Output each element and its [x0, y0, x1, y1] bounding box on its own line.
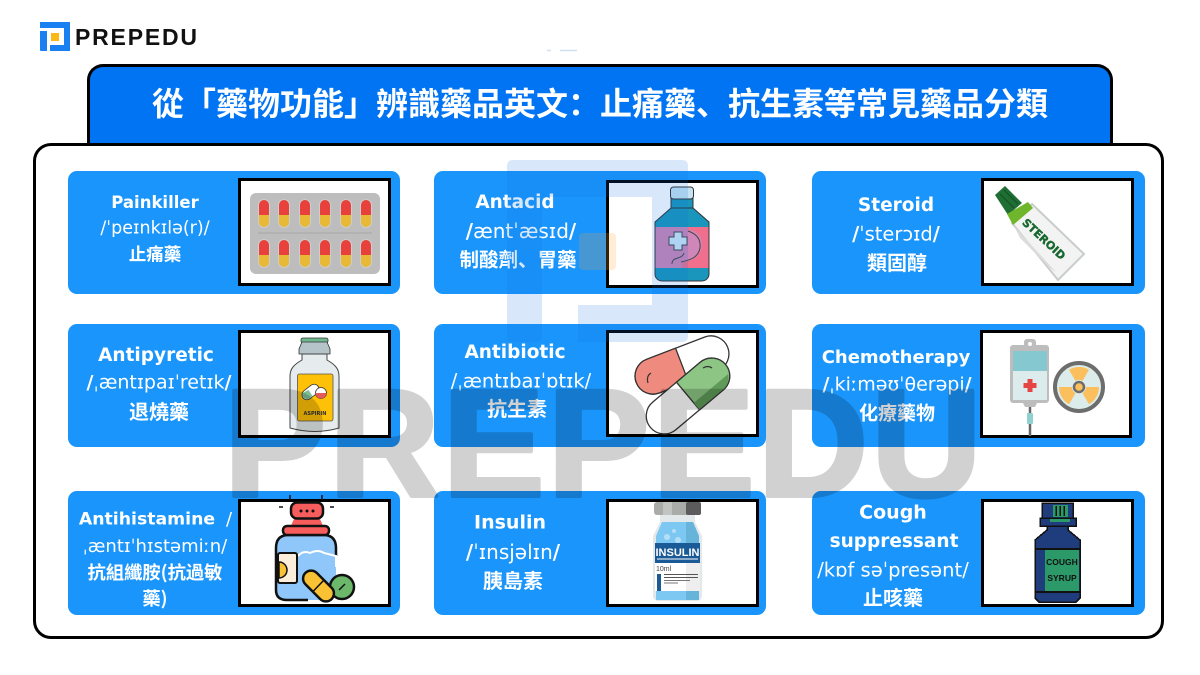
text: Antihistamine: Antihistamine: [79, 509, 215, 529]
text: Antacid: Antacid: [475, 192, 555, 213]
text: Antibiotic: /ˌæntɪbaɪˈɒtɪk/: [451, 369, 591, 392]
icon: steroid tube: [981, 178, 1134, 286]
icon: cough syrup bottle: SYRUP: [1047, 573, 1077, 583]
text: Steroid: 類固醇: [867, 247, 927, 276]
text: Cough suppressant: 止咳藥: [863, 582, 923, 611]
text: Painkiller: [100, 193, 210, 266]
card: Antihistamine: [68, 491, 400, 615]
watermark: PREPEDU logo and wordmark: PREPEDU: [224, 358, 985, 529]
text: Insulin: [466, 512, 560, 594]
icon: antibiotic capsules: [606, 330, 759, 437]
text: Painkiller: Painkiller: [111, 193, 199, 212]
icon: antacid bottle: [606, 180, 759, 288]
icon: insulin vial: INSULIN: [656, 547, 700, 559]
card: Cough suppressant: [812, 491, 1145, 615]
icon: IV bag and radiation symbol: [980, 330, 1132, 438]
text: Antihistamine: 藥): [142, 585, 168, 611]
logo: PREPEDU: [40, 22, 199, 51]
text: Antacid: /æntˈæsɪd/: [466, 219, 576, 243]
logo: PREPEDU: PREPEDU: [75, 24, 199, 50]
text: Antipyretic: [86, 345, 232, 425]
text: Chemotherapy: Chemotherapy: [822, 347, 970, 368]
text: Chemotherapy: [822, 347, 972, 426]
card: Insulin: [434, 491, 766, 615]
icon: aspirin bottle: ASPIRIN: [304, 411, 326, 417]
card: Painkiller: [68, 171, 400, 294]
card: Antipyretic: [68, 324, 400, 447]
text: Antipyretic: Antipyretic: [98, 345, 214, 366]
text: Cough suppressant: suppressant: [830, 531, 958, 552]
text: Antihistamine: 抗組纖胺(抗過敏: [88, 559, 222, 585]
text: Antihistamine: /: [226, 509, 232, 530]
text: Insulin: Insulin: [474, 512, 546, 534]
text: Chemotherapy: /ˌkiːməʊˈθerəpi/: [822, 374, 972, 396]
main panel: [33, 143, 1164, 639]
icon: steroid tube: STEROID: [1019, 216, 1068, 263]
text: Steroid: Steroid: [858, 195, 934, 216]
text: Steroid: [852, 195, 940, 276]
text: Chemotherapy: 化療藥物: [859, 398, 935, 426]
title tab: [87, 64, 1113, 147]
text: Antipyretic: /ˌæntɪpaɪˈretɪk/: [87, 372, 231, 394]
icon: insulin vial: [606, 499, 759, 607]
text: Antibiotic: Antibiotic: [464, 342, 566, 363]
text: Painkiller: /ˈpeɪnkɪlə(r)/: [100, 218, 210, 238]
text: Antacid: [459, 192, 577, 272]
text: Antihistamine: ˌæntɪˈhɪstəmiːn/: [83, 536, 227, 557]
text: Cough suppressant: Cough: [859, 502, 927, 524]
text: Painkiller: 止痛藥: [129, 241, 181, 266]
text: Insulin: /ˈɪnsjəlɪn/: [466, 540, 560, 564]
card: Steroid: [812, 171, 1145, 294]
text: Cough suppressant: /kɒf səˈpresənt/: [817, 558, 969, 581]
icon: cough syrup bottle: COUGH: [1046, 557, 1078, 567]
icon: cough syrup bottle: [981, 499, 1134, 607]
text: Insulin: 胰島素: [483, 565, 543, 594]
icon: aspirin bottle: [238, 330, 391, 438]
text: Steroid: /ˈsterɔɪd/: [852, 222, 940, 245]
icon: blister pack: [238, 178, 391, 286]
text: Antibiotic: 抗生素: [487, 393, 547, 422]
icon: insulin vial: 10ml: [656, 566, 672, 573]
text: Antihistamine: [79, 509, 232, 611]
text: Antacid: 制酸劑、胃藥: [459, 243, 577, 272]
text: Antibiotic: [450, 342, 592, 422]
text: Cough suppressant: [817, 502, 969, 611]
card: Chemotherapy: [812, 324, 1145, 447]
card: Antibiotic: [434, 324, 766, 447]
title: 從「藥物功能」辨識藥品英文：止痛藥、抗生素等常見藥品分類: [152, 79, 1048, 125]
text: Antipyretic: 退燒藥: [129, 396, 189, 425]
card: Antacid: [434, 171, 766, 294]
icon: antihistamine jar: [238, 495, 391, 607]
